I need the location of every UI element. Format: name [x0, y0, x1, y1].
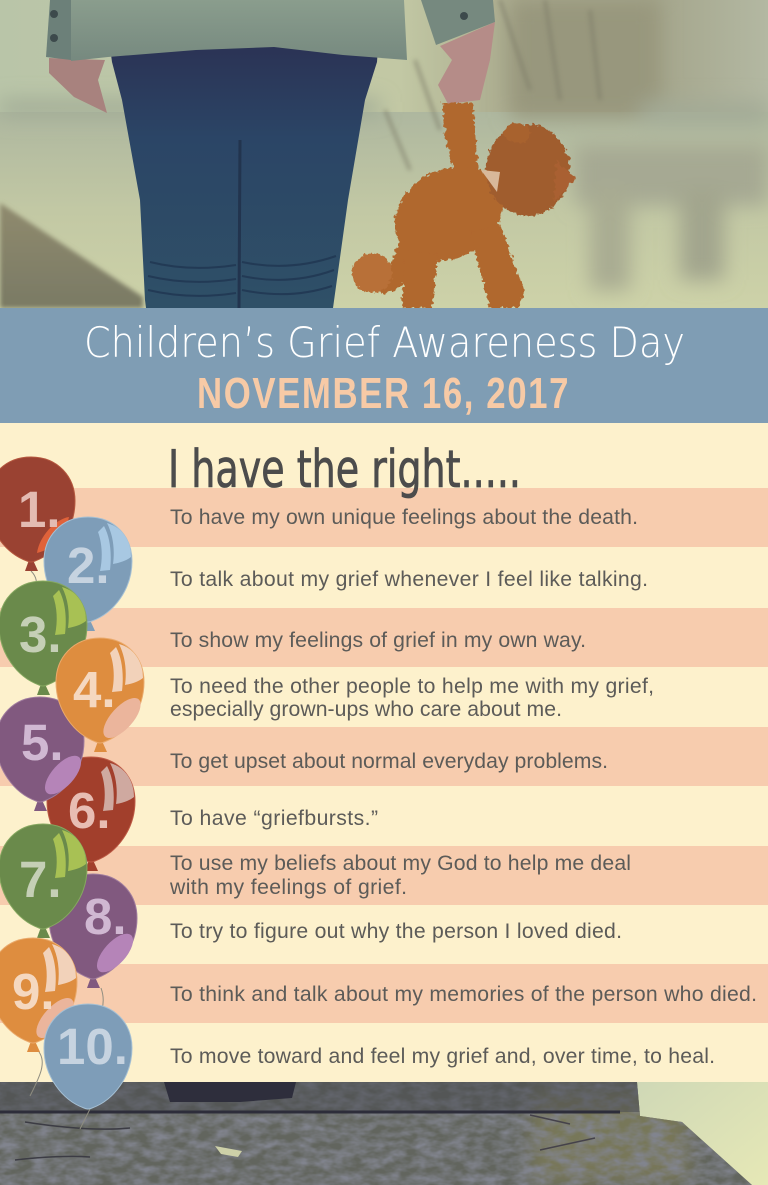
balloon bunch — [0, 457, 147, 1129]
right 2: To talk about my grief whenever I feel like talking. — [170, 568, 648, 591]
right 5: To get upset about normal everyday problems. — [170, 750, 608, 773]
right 4: especially grown-ups who care about me. — [170, 698, 562, 721]
balloon 9 — [0, 938, 80, 1096]
balloon 8 — [49, 874, 139, 1017]
right hand — [438, 22, 495, 104]
photo: person holding teddy bear by the water — [0, 0, 768, 308]
balloon 7 — [0, 824, 87, 938]
rock ledge at left — [0, 203, 143, 308]
balloon 2 — [44, 517, 132, 631]
balloon 7: 7. — [19, 851, 62, 908]
list panel background with stripes — [0, 423, 768, 1082]
photo: stone ledge and feet — [0, 1082, 768, 1185]
balloon 9: 9. — [12, 963, 55, 1020]
coat — [46, 0, 495, 61]
balloon 1 — [0, 457, 75, 592]
date: NOVEMBER 16, 2017 — [197, 369, 570, 418]
right 4: To need the other people to help me with my grief, — [170, 675, 654, 698]
title banner — [0, 308, 768, 423]
right 8: To try to figure out why the person I loved died. — [170, 920, 622, 943]
title: Children's Grief Awareness Day: Children’s Grief Awareness Day — [84, 318, 685, 367]
balloon 3: 3. — [19, 606, 62, 663]
left hand — [49, 58, 107, 113]
right 3: To show my feelings of grief in my own way. — [170, 629, 586, 652]
balloon 8: 8. — [84, 888, 127, 945]
balloon 4 — [56, 638, 147, 752]
right 10: To move toward and feel my grief and, over time, to heal. — [170, 1045, 715, 1068]
jeans — [110, 47, 378, 308]
teddy bear — [352, 103, 576, 308]
balloon 1: 1. — [18, 481, 61, 538]
balloon 6: 6. — [68, 782, 111, 839]
balloon 4: 4. — [73, 661, 116, 718]
balloon 10 — [44, 1004, 132, 1129]
balloon 3 — [0, 581, 87, 695]
right 7: with my feelings of grief. — [169, 876, 407, 899]
right 1: To have my own unique feelings about the death. — [170, 506, 638, 529]
right 7 — [169, 852, 631, 899]
balloon 6 — [47, 757, 135, 871]
right 7: To use my beliefs about my God to help me deal — [170, 852, 631, 875]
balloon 5: 5. — [21, 714, 64, 771]
balloon 10: 10. — [57, 1018, 128, 1075]
right 6: To have “griefbursts.” — [170, 807, 378, 830]
balloon 2: 2. — [67, 537, 110, 594]
heading: I have the right: I have the right..... — [168, 440, 521, 500]
right 9: To think and talk about my memories of the person who died. — [170, 983, 757, 1006]
list of rights — [169, 506, 757, 1068]
balloon 5 — [0, 697, 87, 811]
right 4 — [170, 675, 654, 721]
